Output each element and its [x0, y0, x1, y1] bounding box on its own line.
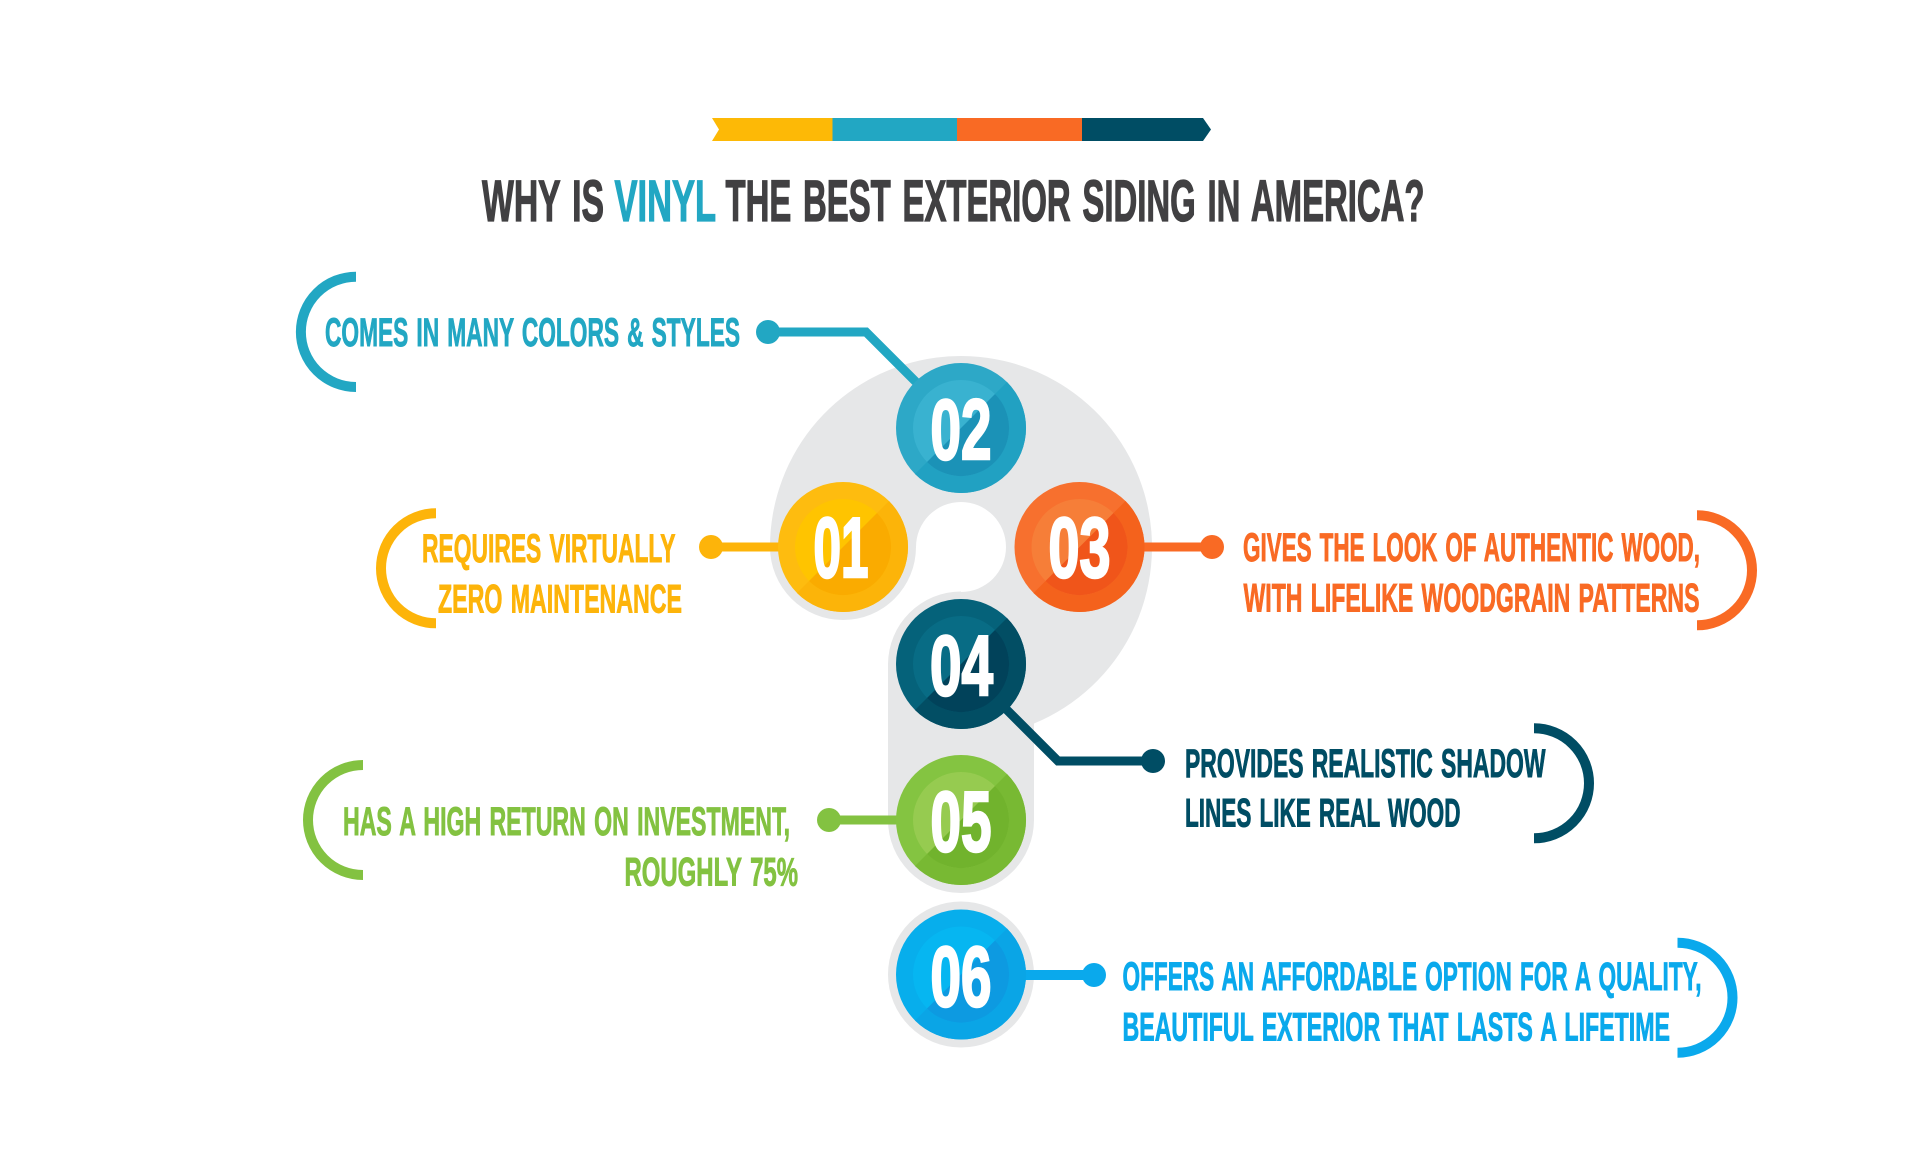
callout 03: gives the look of authentic wood — [1130, 515, 1752, 625]
badge 06 — [896, 910, 1026, 1040]
badge 06: 06 — [930, 930, 992, 1025]
callout 02: comes in many colors and styles: COMES IN MANY COLORS & STYLES — [325, 311, 740, 355]
badge 02: 02 — [930, 383, 992, 478]
title: VINYL — [614, 169, 716, 234]
title — [482, 169, 1424, 234]
callout 05: has a high return on investment — [308, 765, 910, 894]
grey question-mark backdrop — [770, 356, 1152, 893]
callout 02: comes in many colors and styles — [301, 277, 930, 396]
badge 02 — [896, 363, 1026, 493]
callout 01: requires virtually zero maintenance: ZERO MAINTENANCE — [438, 578, 682, 622]
badge 03 — [1014, 482, 1145, 612]
badge 05: 05 — [930, 775, 992, 870]
badge 01: 01 — [814, 501, 868, 596]
callout 04: provides realistic shadow lines: PROVIDES REALISTIC SHADOW — [1185, 742, 1546, 786]
callout 01: requires virtually zero maintenance — [381, 513, 790, 623]
title: WHY IS — [482, 169, 604, 234]
callout 01: requires virtually zero maintenance: REQUIRES VIRTUALLY — [422, 527, 676, 571]
badge 05 — [896, 755, 1026, 885]
grey backdrop circle for item 06 — [888, 902, 1034, 1048]
badge 04 — [896, 599, 1026, 729]
callout 05: has a high return on investment: HAS A HIGH RETURN ON INVESTMENT, — [343, 800, 790, 844]
badge 04: 04 — [930, 619, 993, 714]
callout 06: offers an affordable option — [1010, 943, 1732, 1053]
callout 04: provides realistic shadow lines: LINES LIKE REAL WOOD — [1185, 792, 1460, 836]
callout 05: has a high return on investment: ROUGHLY 75% — [624, 850, 798, 894]
badge 03: 03 — [1048, 501, 1110, 596]
callout 04: provides realistic shadow lines — [1000, 703, 1589, 838]
decorative colour ribbon — [712, 118, 1211, 141]
badge 01 — [778, 482, 908, 612]
